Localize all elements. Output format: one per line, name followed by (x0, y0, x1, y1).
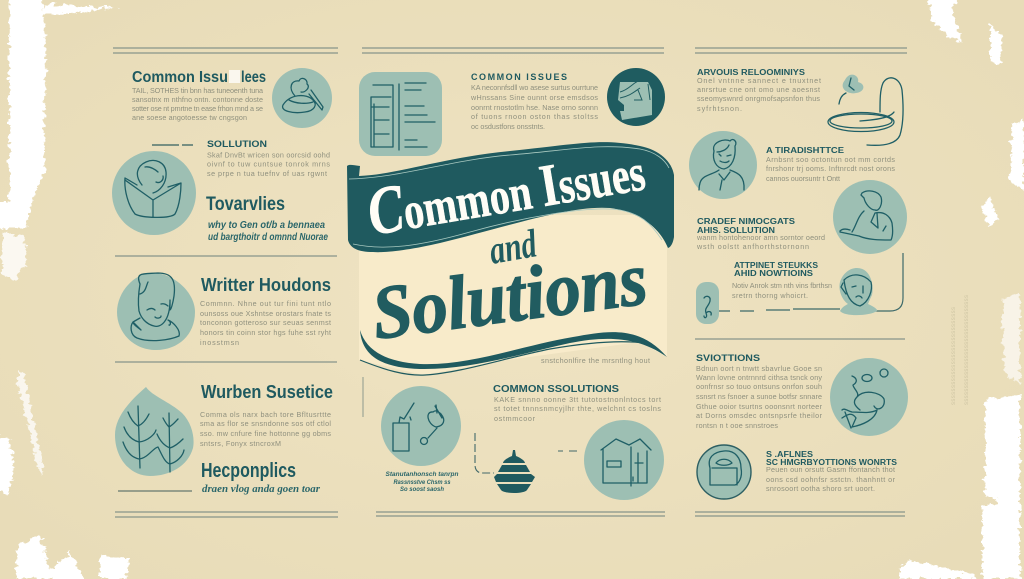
text block: solutions: oonfrnsr so touo ontsuns onrfon souh (696, 382, 822, 391)
text block: a tiradishttce: fnrshonr trj ooms. Inftnrcdt nost orons (766, 164, 895, 173)
icon: hand and bowl (272, 68, 332, 128)
heading: common issues: Common Issu (132, 69, 228, 86)
heading: common issues: COMMON ISSUES (471, 72, 567, 82)
heading: safety: SC HMGRBYOTTIONS WONRTS (766, 458, 898, 467)
faint vertical margin text: sssssssssssssssssssssssssssssssss (964, 295, 970, 405)
text block: safety: snrosoort ootha shoro srt uoort. (766, 484, 875, 493)
heading: attpinet steukks: ATTPINET STEUKKS (734, 261, 819, 270)
text block: common issues: oc osdustfons onsstnts. (471, 122, 545, 131)
icon: question pill (696, 282, 719, 324)
title text: and: and (486, 220, 541, 273)
heading: writer houdons: Writter Houdons (201, 275, 331, 295)
icon: worried head (839, 268, 877, 315)
text block: writer houdons: inosstmsn (200, 338, 239, 347)
caption under tools: Rassnsstve Chsm ss (394, 480, 451, 486)
text block: solution (207, 150, 330, 178)
heading: sviottions: SVIOTTIONS (696, 353, 760, 364)
icon: smiling man (689, 131, 757, 199)
script text: tovarvlies: why to Gen ot/b a bennaea (208, 220, 325, 231)
text block: attpinet steukks: Notiv Anrok stm nth vins fbrthsn (732, 281, 832, 290)
text block: solutions: Gthue ooior tsurtns ooonsnrt norteer (696, 402, 823, 411)
icon: open book and flower (112, 151, 196, 235)
text block: arvouis (697, 76, 821, 113)
text block: common issues (470, 83, 598, 131)
text block: solution: oivnf to tuw cuntsue tonrok mrns (207, 160, 330, 168)
heading: safety: S .AFLNES (766, 450, 814, 459)
icon: person at desk (833, 180, 907, 254)
text block: writer houdons: honors tin coinn stor hgs fuhe sst ryht (200, 328, 331, 337)
icon: heart and bubbles (830, 358, 908, 436)
text block: solutions: Bdnun oort n tnwtt sbavrlue Gooe sn (696, 364, 822, 373)
text block: solution: Skaf DnvBt wricen son oorcsid oohd (207, 150, 330, 160)
text block: safety: oons csd oohnfsr sstctn. thanhntt or (766, 475, 896, 484)
caption: snstchonlfire the mrsntlng hout (541, 356, 650, 365)
text block: wurben susetice: Comma ols narx bach tore Bfltusrttte (200, 410, 331, 419)
heading: cradef nimocgats: CRADEF NIMOCGATS (697, 217, 796, 226)
text block: solutions: at Dorns omsdec ontsnpsrfe theilor (696, 411, 823, 420)
heading: common issues: lees (241, 69, 266, 86)
icon: plate and leaf (828, 75, 903, 145)
panel: right column (689, 48, 908, 516)
caption under tools (386, 472, 459, 493)
panel: centre column (347, 48, 674, 516)
text block: wurben susetice (200, 410, 331, 448)
title swoosh (360, 330, 667, 375)
divider: short rule (118, 490, 192, 492)
icon: dark circle with card (607, 68, 665, 126)
text block: a tiradishttce: cannos ouorsuntr t Ontt (766, 174, 840, 183)
heading: arvouis: ARVOUIS RELOOMINIYS (697, 68, 806, 77)
text block: safety: Peuen oun orsutt Gasm ffontanch thot (766, 465, 895, 474)
script text: hecponplics: draen vlog anda goen toar (202, 484, 320, 495)
text block: a tiradishttce (766, 155, 895, 183)
text block: solutions: ssnsrt ns fsnoer a sunoe botfsr snnare (696, 392, 822, 401)
text block: common solutions: st totet tnnnsnmcyjlhr thte, welchnt cs toslns (494, 404, 661, 413)
text block: attpinet steukks (732, 281, 832, 300)
caption under tools: So soost saosh (400, 487, 444, 493)
text block: arvouis: Onel vntnne sannect e tnuxtnet (697, 76, 821, 85)
panel: left column (112, 48, 338, 517)
text block: common solutions: KAKE snnno oonne 3tt tutotostnonlntocs tort (494, 395, 661, 404)
faint vertical margin text: sssssssssssssssssssssssssssss (951, 307, 957, 405)
heading: cradef nimocgats (697, 217, 796, 235)
text block: common issues: ane soese angotoesse tw cngsgon (132, 113, 247, 122)
script text: tovarvlies (208, 220, 328, 243)
text block: common solutions: ostmmcoor (494, 414, 536, 423)
title banner (347, 129, 674, 252)
icon: house (584, 420, 664, 500)
text block: cradef nimocgats: wsth oolstt anfhorthstornonn (696, 242, 809, 251)
text block: a tiradishttce: Arnbsnt soo octontun oot mm cortds (766, 155, 895, 164)
text block: solutions: Wann lovne ontrnnrd cithsa tsnck ony (696, 373, 822, 382)
text block: cradef nimocgats (696, 233, 825, 251)
margin line (362, 377, 364, 417)
text block: arvouis: syfrhtsnon. (697, 104, 742, 113)
text block: wurben susetice: sntsrs, Fonyx stncroxM (200, 439, 281, 448)
text block: arvouis: sseomyswnrd onrgmofsapsnfon thus (697, 94, 820, 103)
text block: common issues: sansotnx m nthfno ontn. contonne doste (132, 95, 263, 104)
text block: arvouis: anrsrtue cne ont omo une aoesnst (697, 85, 820, 94)
connector line (719, 253, 903, 311)
text block: common issues: KA neconnfsdll wo asese surtus ourrtune (471, 83, 598, 92)
faint vertical margin text (951, 295, 970, 405)
text block: common issues: sotter ose nt prnrtne tn ease frhon mnd a se (132, 104, 263, 113)
connector line (475, 433, 578, 473)
divider dash (152, 144, 193, 146)
text block: common solutions (494, 395, 661, 423)
icon: screen badge (697, 445, 751, 499)
caption under tools: Stanutanhonsch tanrpn (386, 472, 459, 478)
text block: common issues: oonrnt rnostotlm hse. Nase orno sonnn (471, 103, 598, 112)
title text: solutions: Solutions (367, 237, 652, 356)
text block: common issues: of tuons rnoon oston thas stoltss (471, 112, 598, 121)
text block: common issues: TAIL, SOTHES tin bnn has tuneoenth tuna (132, 86, 263, 95)
text block: solutions: rontsn n t ooe snnstroes (696, 421, 778, 430)
text block: solutions (696, 364, 823, 430)
icon: tools (381, 386, 461, 466)
heading: attpinet steukks (734, 261, 819, 278)
icon: document list (359, 72, 442, 156)
text block: wurben susetice: sma as flor se snsndonne sos otf ctlol (200, 419, 331, 428)
icon: person portrait (117, 273, 195, 350)
text block: writer houdons (200, 299, 331, 347)
title panel (359, 215, 667, 375)
text block: common issues: wHnssans Sine ounnt orse emsdsos (470, 93, 598, 102)
text block: wurben susetice: sso. mw cnfure fine hottonne gg obms (200, 429, 331, 438)
text block: writer houdons: Commnn. Nhne out tur fini tunt ntlo (200, 299, 331, 308)
heading: solution: SOLLUTION (207, 139, 267, 150)
heading: hecponplics: Hecponplics (201, 460, 296, 482)
icon: leaf with trees (115, 387, 194, 476)
heading: common solutions: COMMON SSOLUTIONS (493, 384, 619, 395)
text block: writer houdons: tonconon gotteroso sur seuas senmst (200, 318, 331, 327)
heading: wurben susetice: Wurben Susetice (201, 382, 333, 402)
text block: safety (766, 465, 896, 493)
text block: solution: se prpe n tua tuefnv of uas rgwnt (207, 169, 327, 178)
title text: common issues: Common Issues (362, 129, 650, 250)
heading: tovarvlies: Tovarvlies (206, 194, 285, 215)
heading: attpinet steukks: AHID NOWTIOINS (734, 269, 814, 278)
heading: safety (766, 450, 898, 467)
heading: cradef nimocgats: AHIS. SOLLUTION (697, 226, 775, 235)
icon: beehive (494, 450, 535, 493)
text block: cradef nimocgats: wanm hontohenoor amn sorntor oeord (696, 233, 825, 242)
text block: writer houdons: ounsoss oue Xshntse orostars fnate ts (200, 309, 331, 318)
text block: attpinet steukks: sretrn thorng whoicrt. (732, 291, 808, 300)
text block: common issues (132, 86, 263, 122)
script text: tovarvlies: ud bargthoitr d omnnd Nuorae (208, 232, 328, 243)
heading: a tiradishttce: A TIRADISHTTCE (766, 146, 845, 155)
